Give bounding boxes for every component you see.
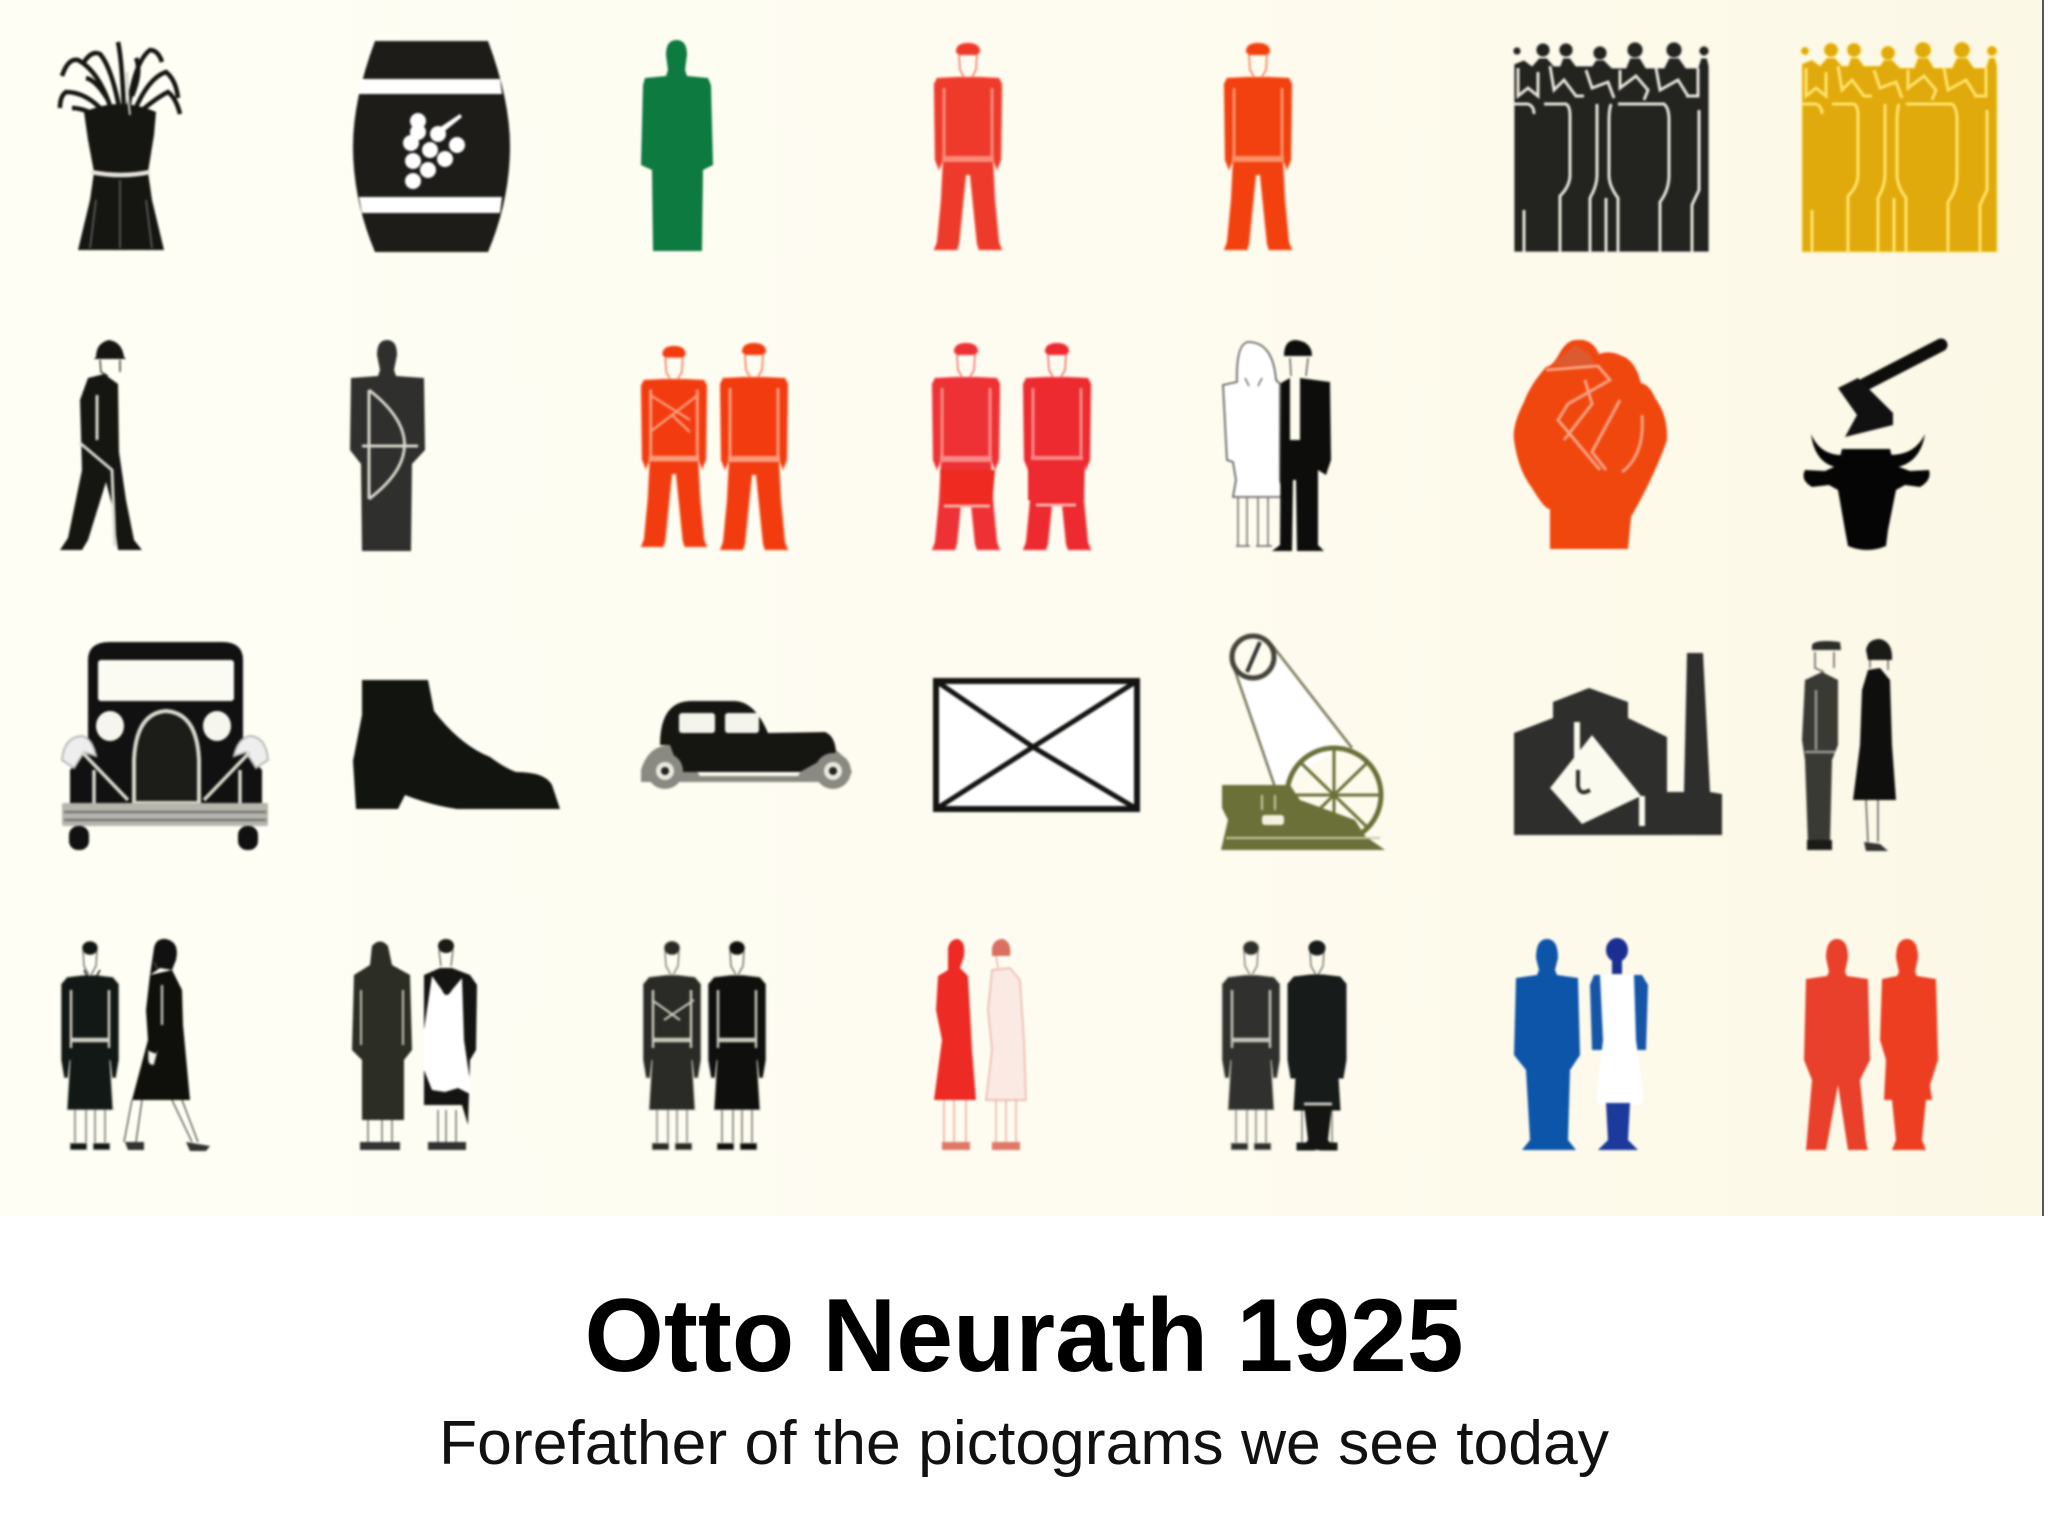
background panel <box>0 0 2043 1216</box>
pictogram grid <box>60 40 1997 1151</box>
icon: raised fist <box>1514 340 1667 549</box>
icon: black crowd <box>1513 42 1709 252</box>
icon: woman in long coat and woman with apron <box>352 939 477 1150</box>
icon: wine barrel <box>353 41 510 252</box>
icon: wheat sheaf <box>60 42 180 250</box>
icon: two red workers, arms crossed <box>641 343 788 550</box>
icon: two women, headscarf and walking <box>61 939 210 1151</box>
icon: two women, arms crossed <box>643 941 766 1150</box>
title: Otto Neurath 1925 <box>584 1278 1464 1394</box>
icon: red-orange worker <box>1224 43 1292 250</box>
icon: red woman and pale pink woman <box>934 939 1026 1150</box>
icon: couple, white dress and black suit <box>1223 340 1331 551</box>
icon: red worker pair, coat and breeches <box>932 343 1091 550</box>
icon: couple in profile <box>1802 639 1896 851</box>
icon: car, front view <box>62 642 268 850</box>
icon: walking man with cane <box>60 340 142 550</box>
icon: blue figures, man and woman with apron <box>1514 938 1648 1150</box>
subtitle: Forefather of the pictograms we see today <box>439 1409 1609 1478</box>
icon: envelope <box>936 681 1137 809</box>
right frame line <box>2042 0 2044 1216</box>
icon: factory with ladle <box>1514 653 1722 835</box>
icon: two dark figures, dress and tall boots <box>1222 941 1346 1150</box>
icon: red silhouettes, man and woman <box>1804 939 1938 1150</box>
icon: yellow crowd <box>1801 42 1997 252</box>
icon: car, side view <box>641 701 852 789</box>
icon: red worker <box>934 43 1002 250</box>
icon: axe over bull head <box>1804 345 1941 550</box>
icon: boot <box>353 680 560 809</box>
icon: bowman silhouette <box>350 340 425 551</box>
icon: belt-driven machine <box>1221 636 1385 850</box>
icon: green figure <box>641 40 713 251</box>
